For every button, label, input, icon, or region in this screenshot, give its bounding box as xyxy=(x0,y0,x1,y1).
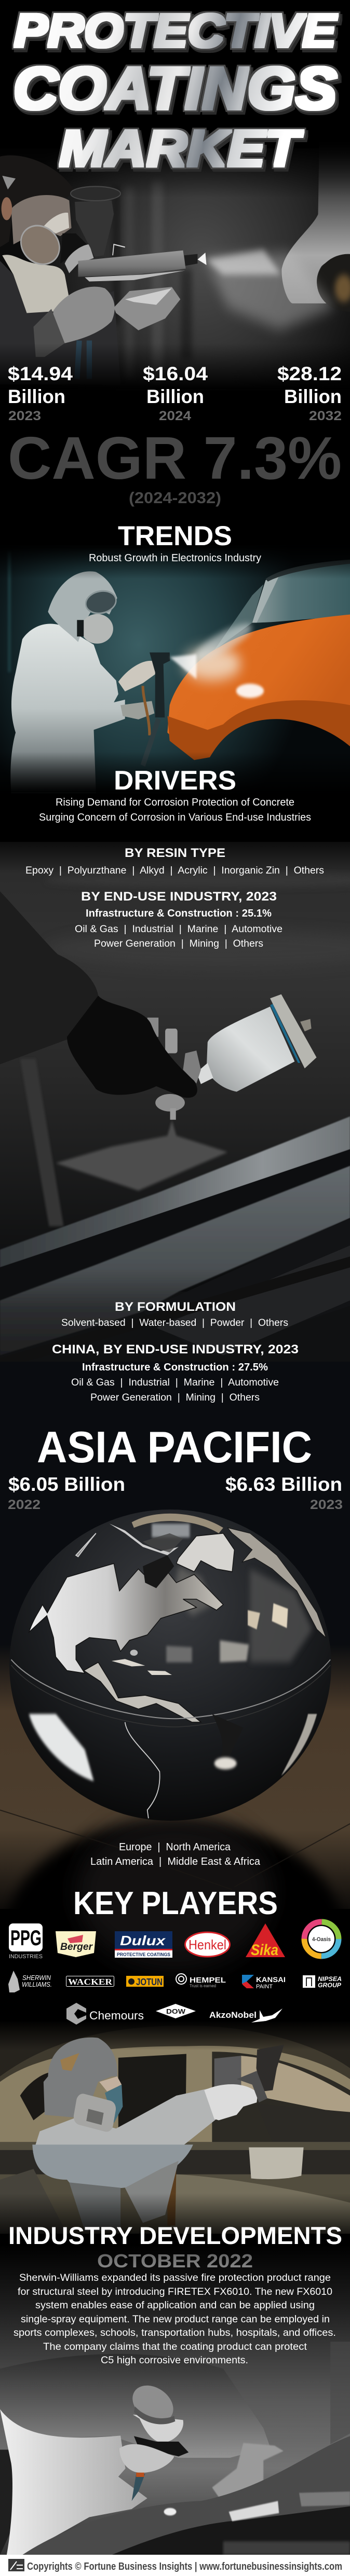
CAGR: CAGR 7.3% xyxy=(8,424,342,492)
logo: Dow: DOW xyxy=(166,2007,186,2015)
painter in white suit xyxy=(10,571,158,793)
spray gun and hoses xyxy=(143,653,196,766)
Asia Pacific 2022 value xyxy=(8,1474,125,1512)
CAGR: (2024-2032) xyxy=(129,489,221,507)
worker xyxy=(0,155,180,384)
market value 2024: $16.04 xyxy=(143,363,208,384)
logo: PPG xyxy=(9,1923,43,1960)
trends text: Robust Growth in Electronics Industry xyxy=(89,552,261,564)
black glove xyxy=(67,995,197,1098)
logo: Dulux xyxy=(115,1931,172,1958)
market value 2032 xyxy=(277,363,342,423)
end-use industry block: BY END-USE INDUSTRY, 2023 xyxy=(81,890,277,904)
key players heading: KEY PLAYERS xyxy=(73,1886,278,1921)
other regions: Latin America | Middle East & Africa xyxy=(90,1856,261,1867)
logo: PPG: INDUSTRIES xyxy=(9,1954,43,1960)
logo: Kansai Paint: PAINT xyxy=(256,1984,273,1990)
logo: Sherwin Williams: WILLIAMS. xyxy=(22,1981,52,1988)
image: chrome globe xyxy=(9,1509,331,1821)
development text: single-spray equipment. The new product range can be employed in xyxy=(21,2314,330,2325)
other regions xyxy=(90,1841,261,1867)
logo: Chemours: Chemours xyxy=(89,2009,144,2022)
market value 2032: $28.12 xyxy=(277,363,342,384)
market value 2024: Billion xyxy=(146,386,204,407)
globe section background xyxy=(0,1362,350,1870)
paint cup and spray gun xyxy=(119,2379,189,2501)
title: MARKET xyxy=(59,120,303,177)
hooded torso xyxy=(0,2354,270,2458)
title xyxy=(13,5,338,177)
end-use industry block: Power Generation | Mining | Others xyxy=(94,938,263,949)
globe reflections xyxy=(11,1514,330,1727)
Asia Pacific 2022 value: $6.05 Billion xyxy=(8,1474,125,1495)
logo: AkzoNobel xyxy=(209,2009,282,2023)
market value 2023 xyxy=(8,363,73,423)
development text: system enables ease of application and can be applied using xyxy=(35,2300,315,2311)
gun and paint cup xyxy=(147,994,317,1120)
logo: 4 Oasis xyxy=(304,1922,339,1956)
spray gun xyxy=(71,186,207,282)
title: COATINGS xyxy=(13,56,337,122)
end-use industry block xyxy=(75,890,282,949)
industry developments heading: INDUSTRY DEVELOPMENTS xyxy=(8,2222,342,2249)
logo: 4 Oasis: 4-Oasis xyxy=(312,1936,331,1943)
Asia Pacific 2023 value: $6.63 Billion xyxy=(225,1474,342,1495)
logo: Kansai Paint: KANSAI xyxy=(256,1975,286,1984)
logo: Dulux: Dulux xyxy=(120,1933,166,1948)
China end-use block: Infrastructure & Construction : 27.5% xyxy=(82,1362,268,1373)
China end-use block xyxy=(52,1342,299,1403)
caribbean xyxy=(112,1659,145,1667)
logo: Sika: Sika xyxy=(251,1942,278,1959)
Asia Pacific 2023 value: 2023 xyxy=(310,1498,343,1512)
resin type list: Epoxy | Polyurzthane | Alkyd | Acrylic | Inorganic Zin | Others xyxy=(25,865,324,876)
logo: Henkel: Henkel xyxy=(189,1937,226,1952)
central america xyxy=(84,1663,201,1722)
north america xyxy=(29,1563,223,1673)
by formulation block: BY FORMULATION xyxy=(115,1300,236,1314)
Asia Pacific heading: ASIA PACIFIC xyxy=(37,1423,312,1472)
development text: Sherwin-Williams expanded its passive fire protection product range xyxy=(19,2272,331,2283)
development text xyxy=(14,2272,336,2366)
photo: gloved hand with spray gun xyxy=(0,842,350,1429)
logo: Sherwin Williams: SHERWIN xyxy=(22,1974,51,1982)
market value 2032: 2032 xyxy=(309,409,342,423)
title: PROTECTIVE xyxy=(14,5,338,57)
development text: The company claims that the coating product can protect xyxy=(43,2341,307,2352)
equator ring xyxy=(11,1659,330,1719)
logo: Jotun: JOTUN xyxy=(136,1977,163,1987)
logo: PPG: PPG xyxy=(10,1926,42,1950)
development text: C5 high corrosive environments. xyxy=(101,2355,248,2366)
market value 2032: Billion xyxy=(284,386,342,407)
greenland and arctic islands xyxy=(177,1533,234,1572)
China end-use block: CHINA, BY END-USE INDUSTRY, 2023 xyxy=(52,1342,299,1356)
logo: Kansai Paint xyxy=(242,1975,286,1990)
drivers text: Rising Demand for Corrosion Protection of Concrete xyxy=(56,797,294,808)
photo: white-suited painter with hood xyxy=(0,2245,350,2555)
logo: Dow xyxy=(156,2004,196,2018)
photo: spray gun operator xyxy=(0,143,350,390)
trends heading: TRENDS xyxy=(118,521,232,551)
suited painter xyxy=(32,2038,284,2231)
icon: Fortune Business Insights logo xyxy=(8,2559,24,2571)
drivers heading: DRIVERS xyxy=(114,766,236,796)
Asia Pacific 2022 value: 2022 xyxy=(8,1498,41,1512)
photo: worker painting tan car xyxy=(0,2020,350,2245)
logo: Sika xyxy=(246,1923,285,1959)
logo: Hempel: HEMPEL xyxy=(190,1976,226,1985)
arm xyxy=(0,891,98,1064)
by formulation block xyxy=(61,1300,288,1328)
eurasia edge xyxy=(227,1528,326,1638)
by formulation block: Solvent-based | Water-based | Powder | Others xyxy=(61,1318,288,1328)
logo: Sherwin Williams xyxy=(8,1971,52,1992)
logo: Dulux: PROTECTIVE COATINGS xyxy=(117,1952,170,1957)
car xyxy=(167,560,350,760)
development text: sports complexes, schools, transportation hubs, hospitals, and offices. xyxy=(14,2327,336,2338)
market value 2024: 2024 xyxy=(159,409,191,423)
brown wall xyxy=(0,1645,350,2055)
car hood xyxy=(22,2436,350,2555)
by resin type heading: BY RESIN TYPE xyxy=(125,846,225,860)
Asia Pacific 2023 value xyxy=(225,1474,343,1512)
development text: for structural steel by introducing FIRETEX FX6010. The new FX6010 xyxy=(18,2286,332,2297)
market value 2023: 2023 xyxy=(8,409,41,423)
spray mist xyxy=(56,1120,227,1190)
logo: Nipsea Group: NIPSEA xyxy=(318,1975,342,1983)
logo: Berger: Berger xyxy=(60,1942,93,1952)
end-use industry block: Infrastructure & Construction : 25.1% xyxy=(86,908,272,919)
market value 2024 xyxy=(143,363,208,423)
market value 2023: $14.94 xyxy=(8,363,73,384)
continents xyxy=(29,1524,326,1722)
logo: Nipsea Group xyxy=(303,1975,342,1989)
development date: OCTOBER 2022 xyxy=(97,2250,253,2272)
logo: Jotun xyxy=(126,1976,164,1987)
logo: Henkel xyxy=(185,1932,230,1957)
China end-use block: Power Generation | Mining | Others xyxy=(90,1392,260,1403)
footer xyxy=(0,2555,350,2576)
other regions: Europe | North America xyxy=(119,1841,231,1853)
drivers text xyxy=(39,797,311,823)
logo: Hempel: Trust is earned xyxy=(190,1984,216,1988)
logo: Berger xyxy=(56,1931,96,1957)
logo: AkzoNobel: AkzoNobel xyxy=(209,2010,257,2020)
market value 2023: Billion xyxy=(8,386,65,407)
foreground bands xyxy=(0,1116,350,1369)
logo: Wacker: WACKER xyxy=(68,1977,113,1987)
China end-use block: Oil & Gas | Industrial | Marine | Automotive xyxy=(71,1377,279,1388)
drivers text: Surging Concern of Corrosion in Various End-use Industries xyxy=(39,812,311,823)
logo: Nipsea Group: GROUP xyxy=(318,1982,342,1989)
logo: Chemours xyxy=(66,2003,144,2025)
logos: key players xyxy=(8,1922,342,2025)
photo: worker painting orange car xyxy=(0,546,350,793)
end-use industry block: Oil & Gas | Industrial | Marine | Automotive xyxy=(75,924,282,935)
logo: Hempel xyxy=(176,1974,226,1988)
